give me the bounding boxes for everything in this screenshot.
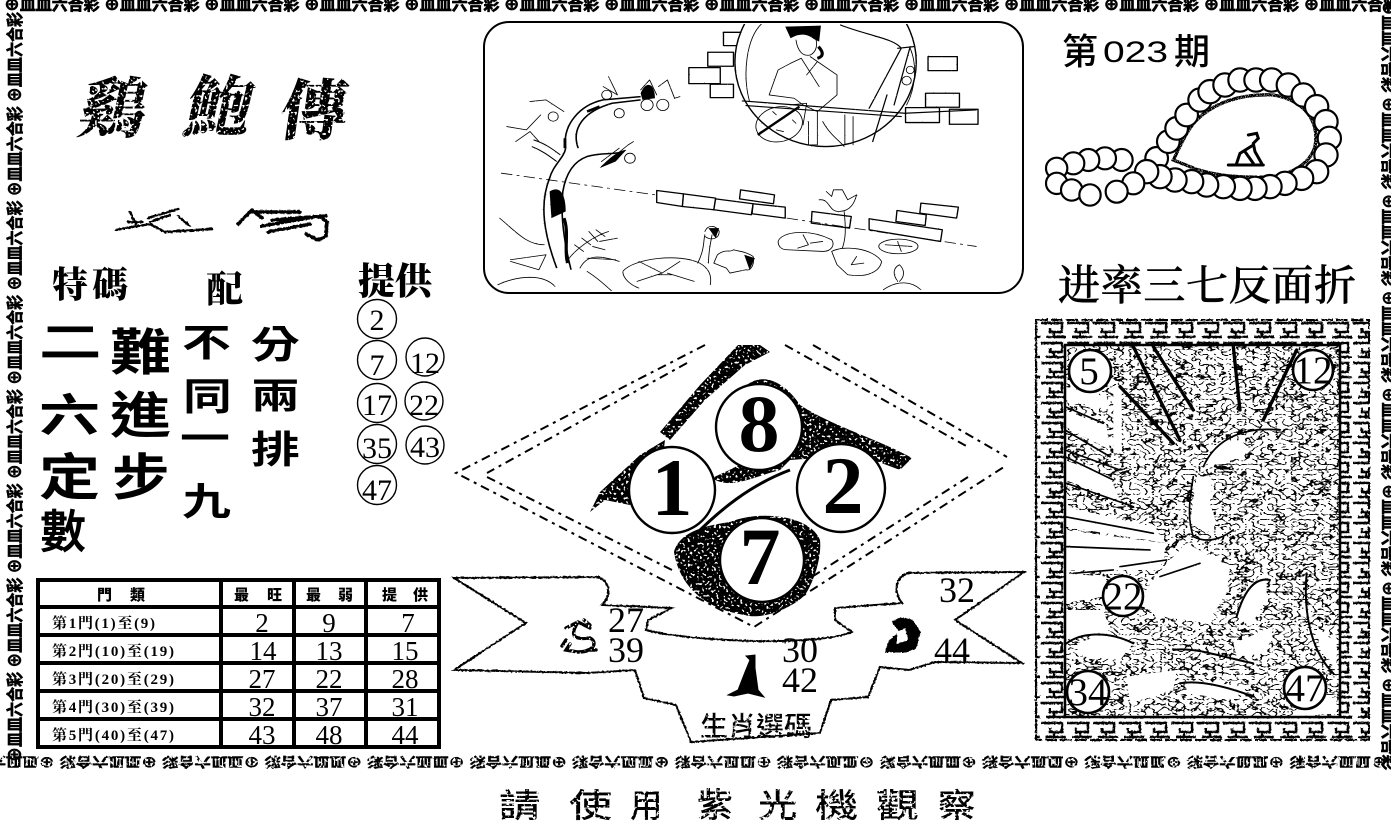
portrait texture — [1065, 345, 1340, 717]
table values: 2 — [255, 608, 269, 638]
portrait number badges: 22 — [1104, 575, 1142, 618]
table header: 提 供 — [382, 586, 428, 604]
icon: lotus leaves and flowers — [498, 190, 921, 291]
ribbon zodiac numbers: 42 — [782, 660, 818, 700]
table row labels: 第2門(10)至(19) — [52, 642, 174, 660]
issue number: 第 — [1062, 31, 1098, 72]
dark swirl — [590, 345, 912, 616]
meander border — [1035, 320, 1370, 740]
verse column two: 難 — [110, 325, 171, 381]
center emblem: four numbers: 2 — [822, 440, 864, 531]
table values: 44 — [392, 720, 419, 750]
icon: moon window — [734, 24, 977, 148]
verse column one — [39, 320, 101, 558]
ribbon zodiac numbers: 32 — [939, 570, 975, 610]
footer instruction: 請 — [499, 787, 540, 824]
icon: tree foliage — [507, 77, 680, 167]
verse column two — [110, 325, 171, 506]
verse column one: 六 — [39, 391, 100, 441]
table row labels: 第5門(40)至(47) — [52, 726, 174, 744]
table header — [97, 586, 428, 604]
ribbon zodiac numbers: 44 — [934, 630, 970, 670]
verse column three: 不 — [182, 322, 231, 365]
footer instruction: 察 — [938, 787, 976, 824]
calligraphy subtitle scribble — [116, 209, 327, 240]
table row labels — [52, 614, 174, 744]
verse column two: 步 — [112, 450, 169, 506]
provided numbers in circles: 43 — [410, 431, 440, 464]
icon: bead string with monkey — [1046, 68, 1341, 206]
icon: monkey — [1228, 133, 1263, 165]
table values: 7 — [401, 608, 415, 638]
verse column two: 進 — [110, 388, 171, 444]
footer instruction: 紫 — [697, 787, 733, 824]
table values: 27 — [248, 664, 276, 694]
verse column one: 數 — [40, 506, 86, 558]
illustration panel: woman at moon window with lotus pond — [484, 0, 1023, 293]
provided numbers in circles: 7 — [370, 349, 384, 382]
verse column one: 二 — [39, 320, 101, 367]
icon: woman — [752, 26, 853, 147]
verse column four: 排 — [251, 429, 300, 472]
verse column three: 九 — [182, 481, 231, 524]
table values: 32 — [248, 692, 276, 722]
verse column three — [180, 322, 232, 524]
portrait number badges — [1067, 349, 1333, 714]
portrait highlights — [1065, 387, 1337, 717]
footer instruction: 機 — [815, 788, 858, 824]
provided numbers in circles: 35 — [362, 432, 392, 465]
table values: 22 — [316, 664, 342, 694]
verse column four: 分 — [251, 324, 300, 367]
issue number: 期 — [1174, 31, 1210, 72]
provided numbers in circles: 17 — [362, 389, 392, 422]
panel: halftone portrait — [1035, 320, 1370, 740]
table values — [248, 608, 419, 750]
footer instruction: 光 — [758, 787, 798, 824]
center emblem: four numbers — [456, 345, 1007, 627]
table values: 9 — [322, 608, 336, 638]
table values: 14 — [250, 636, 277, 666]
ribbon label: 生肖選碼 — [700, 712, 812, 742]
bottom border strip: ⊕皿皿六合彩 ⊕皿皿六合彩 ⊕皿皿六合彩 ⊕皿皿六合彩 ⊕皿皿六合彩 ⊕皿皿六合彩 ⊕皿皿六合彩 ⊕皿皿六合彩 ⊕皿皿六合彩 ⊕皿皿六合彩 ⊕皿皿六合彩 ⊕皿皿六合彩 ⊕皿皿六合彩 ⊕皿皿六合彩 — [0, 754, 1387, 770]
portrait number badges: 34 — [1068, 671, 1108, 714]
portrait rays — [1065, 347, 1333, 697]
dashed diamond — [456, 345, 1007, 627]
verse column one: 定 — [39, 450, 100, 506]
table values: 28 — [392, 664, 418, 694]
table: door categories — [38, 580, 439, 750]
swirl curve — [695, 470, 790, 535]
table header: 門 類 — [97, 587, 145, 604]
provided numbers in circles — [358, 300, 444, 507]
footer instruction — [499, 787, 976, 824]
provided numbers in circles: 47 — [362, 474, 392, 507]
provided numbers in circles: 22 — [409, 389, 439, 422]
center emblem: four numbers: 1 — [652, 442, 692, 533]
icon: dragon — [562, 620, 596, 652]
icon: tree — [532, 97, 641, 270]
calligraphy title — [73, 73, 353, 149]
footer instruction: 使 — [569, 788, 612, 824]
table row labels: 第3門(20)至(29) — [52, 670, 174, 688]
portrait number badges: 5 — [1079, 350, 1099, 393]
table row labels: 第4門(30)至(39) — [52, 698, 174, 716]
portrait number badges: 47 — [1286, 667, 1324, 710]
inner frame edge — [1065, 345, 1340, 717]
verse column three: 一 — [180, 419, 230, 461]
table header: 最 弱 — [306, 587, 353, 604]
ribbon zodiac numbers: 30 — [782, 630, 818, 670]
heading: pairing: 配 — [206, 269, 243, 311]
ribbon zodiac numbers — [608, 570, 975, 700]
icon: monkey zodiac — [728, 655, 764, 697]
table values: 15 — [392, 636, 418, 666]
verse column four: 兩 — [251, 376, 300, 416]
table values: 48 — [316, 720, 342, 750]
table values: 31 — [392, 692, 418, 722]
verse column four — [251, 324, 300, 472]
icon: wall bricks — [657, 32, 978, 241]
icon: tiger — [885, 618, 920, 652]
verse column three: 同 — [183, 376, 232, 419]
portrait number badges: 12 — [1294, 349, 1332, 392]
footer instruction: 觀 — [876, 788, 919, 824]
table values: 13 — [316, 636, 342, 666]
ribbon banner — [454, 570, 1024, 742]
icon: curtain — [841, 25, 914, 142]
wall line — [501, 173, 976, 246]
number discs — [629, 384, 885, 602]
issue number: 023 — [1103, 36, 1168, 69]
issue number — [1062, 31, 1210, 72]
calligraphy title: 鮑 — [179, 73, 260, 145]
heading: provided: 提供 — [358, 261, 435, 303]
slogan: 进率三七反面折 — [1058, 263, 1356, 310]
center emblem: four numbers: 8 — [738, 378, 780, 469]
table values: 43 — [248, 720, 276, 750]
center emblem: four numbers: 7 — [740, 511, 780, 602]
table row labels: 第1門(1)至(9) — [52, 614, 155, 632]
table header: 最 旺 — [234, 587, 282, 604]
footer instruction: 用 — [630, 787, 662, 824]
heading: special code: 特碼 — [52, 265, 128, 305]
calligraphy title: 傳 — [276, 76, 353, 149]
table values: 37 — [316, 692, 342, 722]
provided numbers in circles: 2 — [370, 304, 384, 337]
ribbon zodiac numbers: 27 — [608, 600, 644, 640]
calligraphy title: 鷄 — [73, 75, 154, 147]
inner loop edge — [1173, 95, 1316, 177]
ribbon zodiac numbers: 39 — [608, 630, 644, 670]
provided numbers in circles: 12 — [410, 347, 440, 380]
